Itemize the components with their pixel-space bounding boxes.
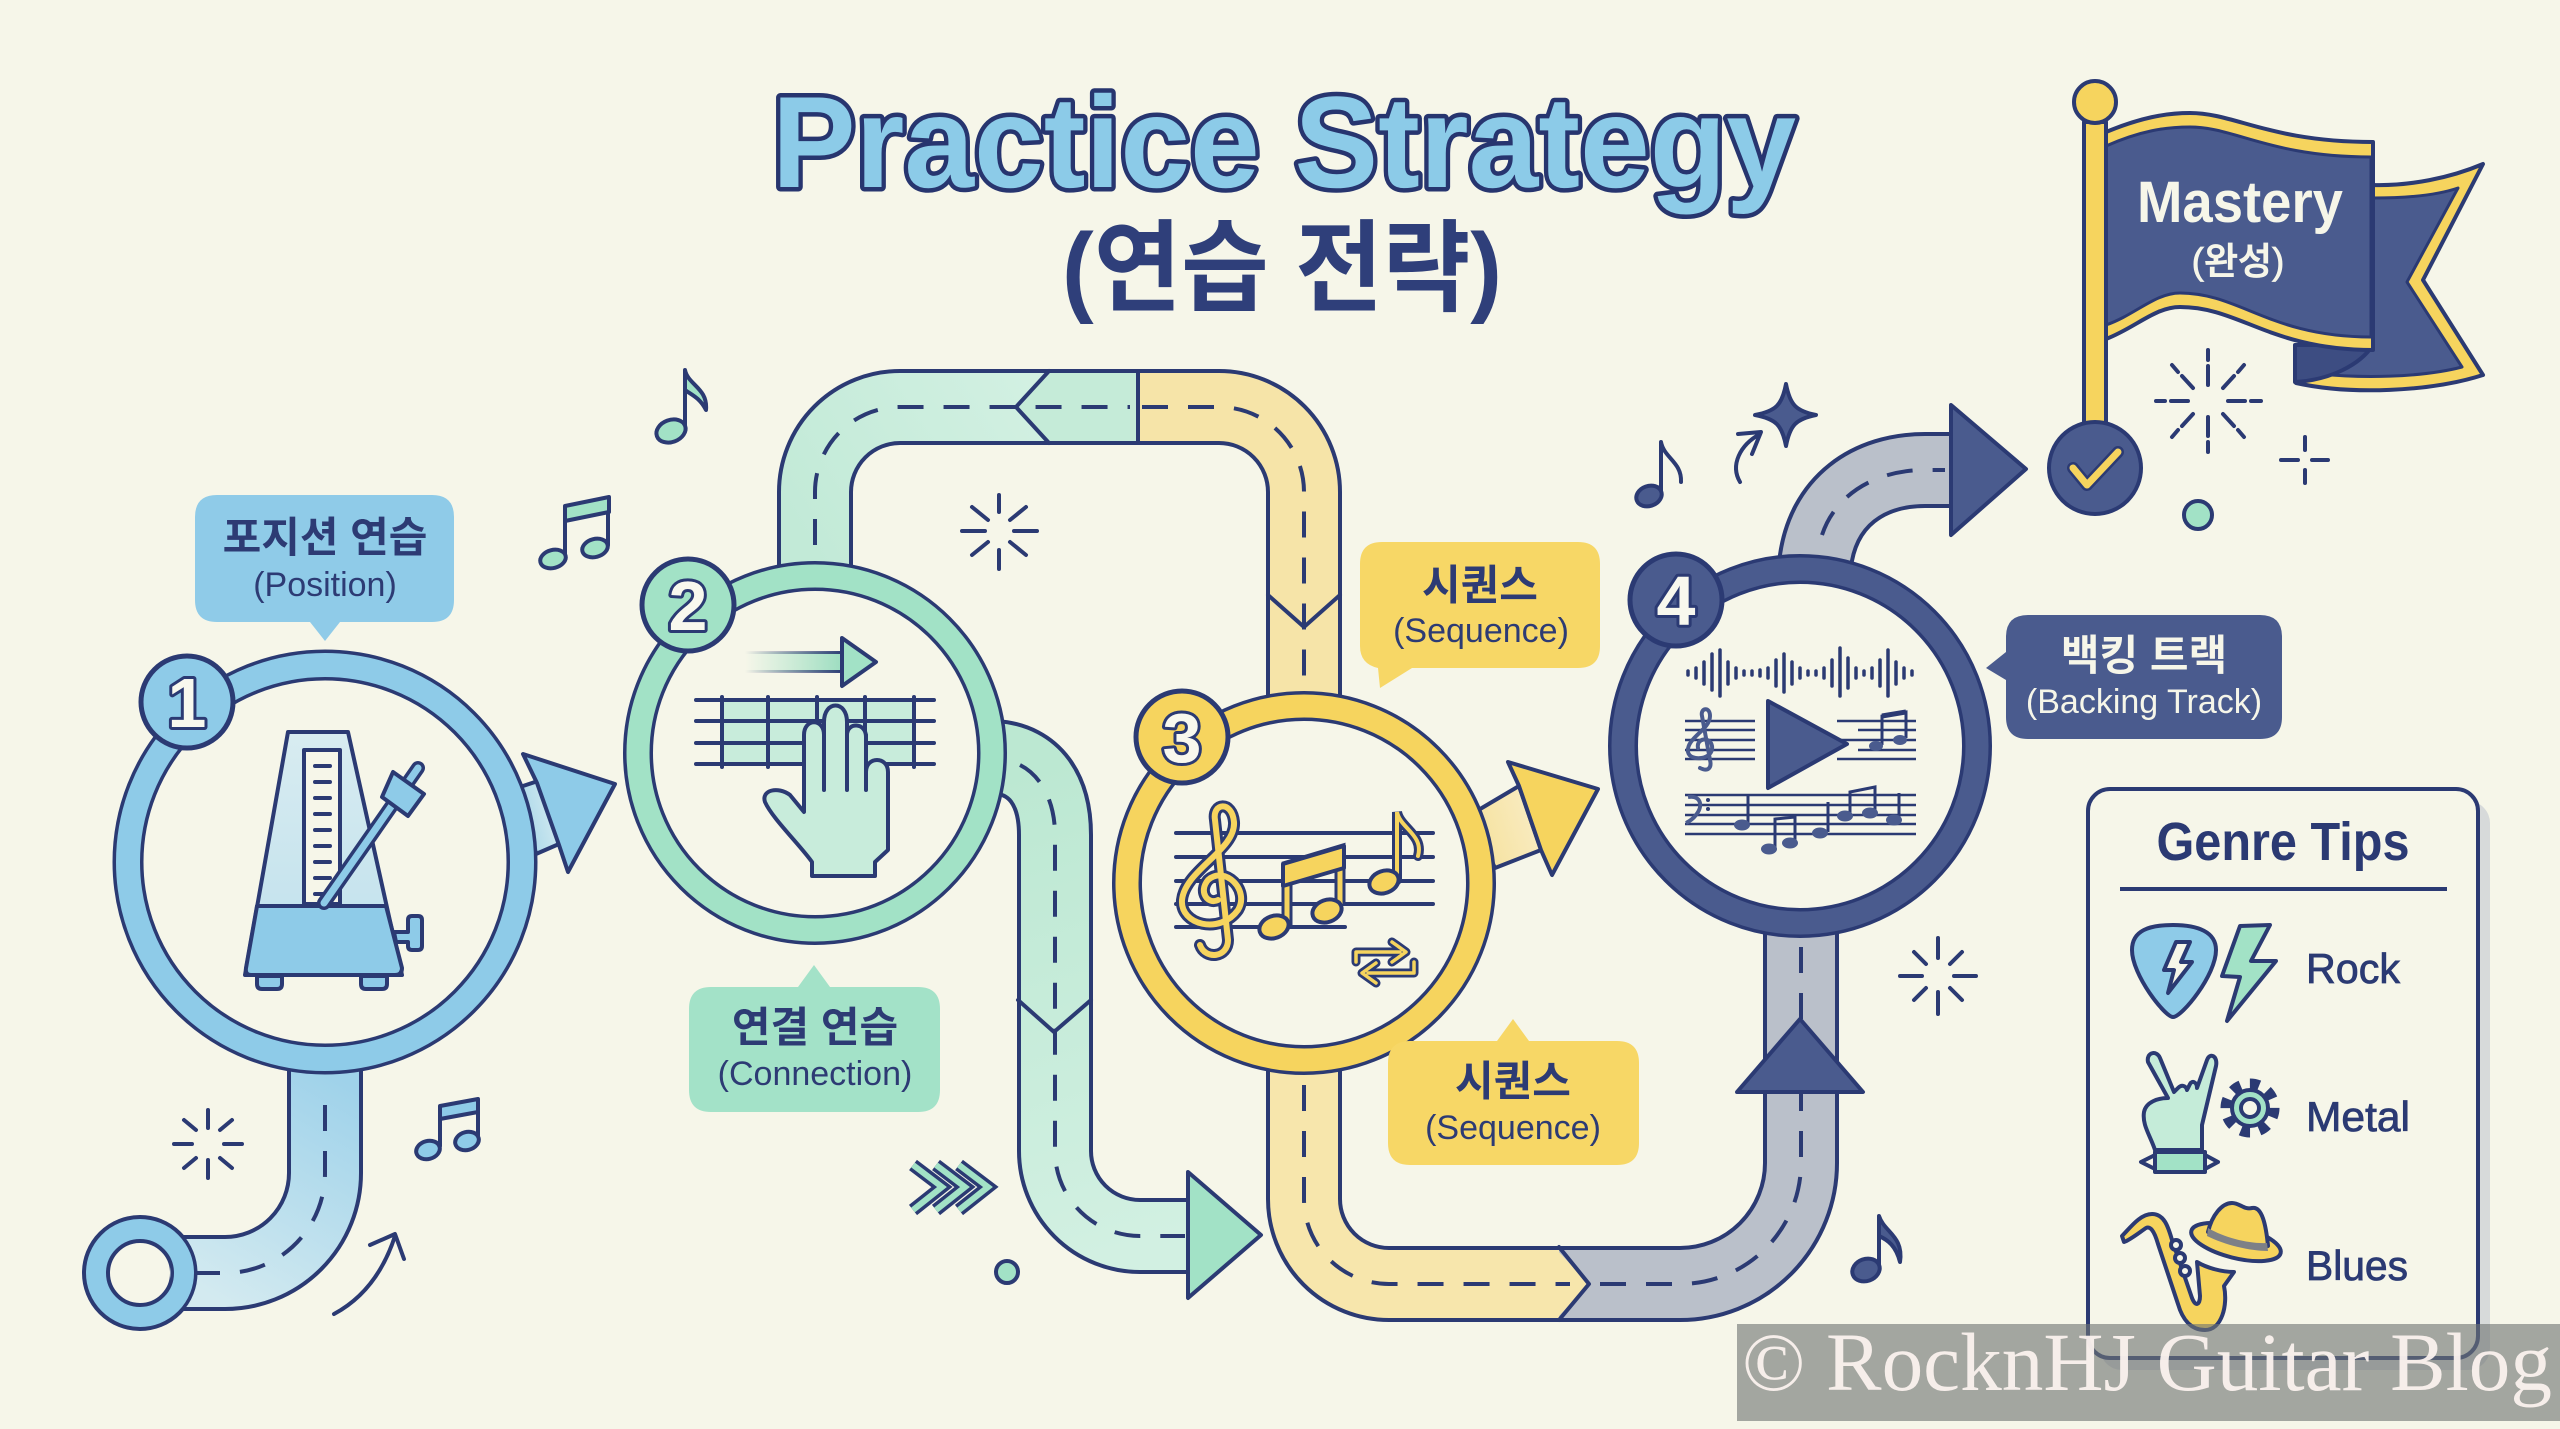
step 4 number badge: 4	[1657, 562, 1696, 640]
callout: sequence bottom: (Sequence)	[1425, 1109, 1601, 1147]
road: step 2 up and over, green	[815, 371, 1138, 575]
icon: backing track waveform, play and staves	[1685, 648, 1916, 854]
heading: genre tips: Genre Tips	[2156, 812, 2410, 872]
callout: connection: 연결 연습	[732, 1004, 898, 1051]
step 3 ring	[1127, 706, 1481, 1060]
icon: guitar pick and lightning	[2132, 925, 2276, 1021]
callout: sequence top: 시퀀스	[1422, 562, 1538, 609]
road: start to step 1	[96, 1060, 325, 1317]
decoration: burst near start	[174, 1110, 242, 1178]
callout: sequence top: (Sequence)	[1393, 612, 1569, 650]
label: metal: Metal	[2306, 1093, 2410, 1140]
decoration: navy note bottom	[1849, 1216, 1901, 1285]
icon: sheet music with clef and notes	[1176, 806, 1433, 983]
callout: connection	[689, 965, 940, 1112]
arrow: step 3 to step 4	[1470, 762, 1598, 875]
step 1 number badge	[141, 656, 233, 748]
callout: backing track	[1986, 615, 2282, 739]
flag: mastery: Mastery	[2137, 170, 2343, 235]
decoration: burst right of step 4	[1900, 938, 1976, 1014]
icon: hand on fretboard	[696, 638, 934, 876]
decoration: navy eighth note	[1633, 442, 1681, 510]
callout: sequence top	[1360, 542, 1600, 688]
road: top segment into step 3, yellow	[1138, 370, 1340, 705]
decoration: burst upper centre	[962, 495, 1037, 569]
label: blues: Blues	[2306, 1242, 2408, 1289]
callout: position: (Position)	[253, 566, 397, 604]
road: step 2 down to step 3, green	[995, 757, 1261, 1298]
callout: position: 포지션 연습	[223, 514, 427, 561]
step 3 number badge: 3	[1163, 699, 1201, 777]
title: Practice Strategy	[772, 69, 1796, 215]
flag: mastery: (완성)	[2192, 241, 2284, 282]
title	[772, 69, 1796, 325]
road: step 3 bottom, yellow	[1304, 1060, 1589, 1320]
flag: mastery	[2049, 81, 2483, 514]
road: step 4 to flag, gray	[1815, 405, 2026, 565]
callout: sequence bottom: 시퀀스	[1455, 1058, 1571, 1105]
arrow: small curved near star	[1736, 432, 1761, 482]
label: rock: Rock	[2306, 945, 2401, 992]
arrow: curved near start	[334, 1234, 404, 1314]
icon: metronome	[245, 732, 424, 989]
step 3 number badge	[1136, 691, 1228, 783]
watermark: © RocknHJ Guitar Blog	[1742, 1316, 2552, 1408]
step 4 ring	[1623, 569, 1977, 923]
decoration: green dot	[996, 1261, 1018, 1283]
title: (연습 전략)	[1062, 213, 1502, 325]
step 2 number badge	[642, 559, 734, 651]
decoration: plus sparkle	[2281, 437, 2328, 483]
decoration: burst under flag	[2156, 350, 2261, 452]
decoration: chevrons	[913, 1165, 988, 1210]
callout: backing track: 백킹 트랙	[2061, 632, 2227, 679]
step 1 number badge: 1	[168, 664, 206, 742]
panel: genre tips	[2088, 789, 2490, 1370]
callout: connection: (Connection)	[718, 1055, 912, 1093]
arrow: step 1 to step 2	[520, 754, 615, 872]
decoration: green beamed notes	[538, 497, 610, 571]
icon: saxophone and hat	[2122, 1203, 2285, 1330]
decoration: blue beamed notes	[414, 1099, 481, 1162]
icon: rock hand and gear	[2141, 1053, 2274, 1172]
road: step 3 to step 4, gray	[1550, 925, 1863, 1284]
decoration: green dot near flag	[2184, 501, 2212, 529]
callout: backing track: (Backing Track)	[2026, 683, 2262, 721]
decoration: four-point star	[1755, 384, 1816, 446]
step 1 ring	[128, 665, 522, 1059]
step 2 ring	[638, 576, 992, 930]
step 2 number badge: 2	[669, 567, 707, 645]
callout: position	[195, 495, 454, 641]
step 4 number badge	[1630, 554, 1722, 646]
decoration: green eighth note	[653, 370, 706, 446]
callout: sequence bottom	[1388, 1019, 1639, 1165]
